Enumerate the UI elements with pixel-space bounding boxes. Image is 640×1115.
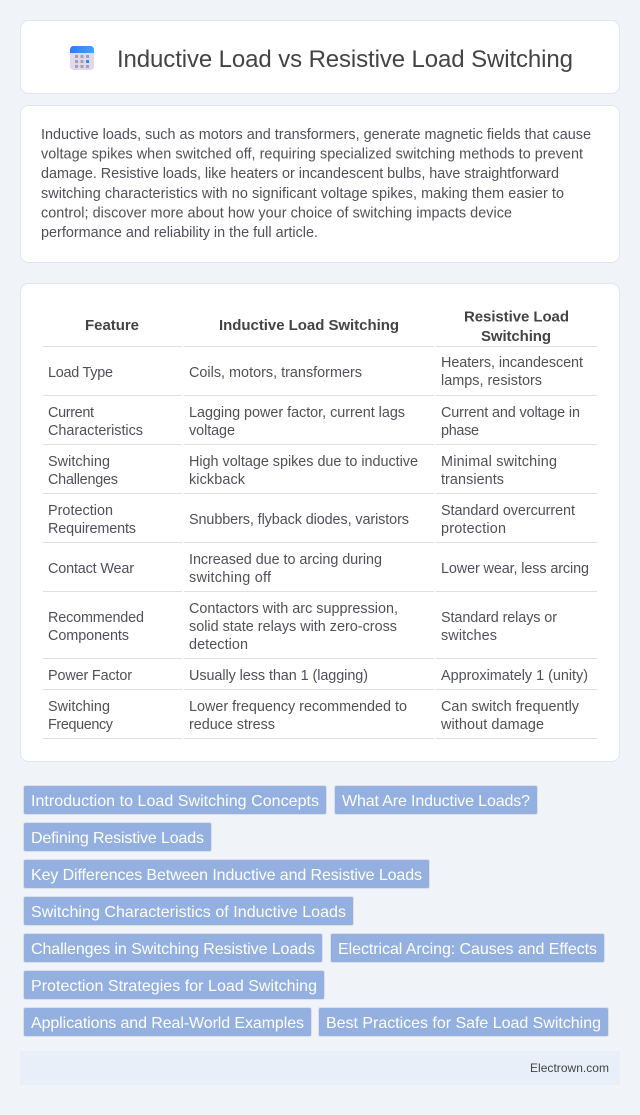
icon: calendar grid bbox=[70, 46, 94, 70]
tag: protection strategies: Protection Strategies for Load Switching bbox=[31, 978, 317, 995]
row: current characteristics: Current bbox=[48, 405, 94, 421]
table header: Switching bbox=[481, 328, 551, 345]
row: recommended components: Standard relays or bbox=[441, 610, 557, 626]
row: current characteristics: voltage bbox=[189, 423, 235, 439]
table header: Resistive Load bbox=[464, 308, 569, 326]
row: load type: Coils, motors, transformers bbox=[189, 365, 362, 381]
row: protection requirements bbox=[43, 503, 597, 543]
row: power factor: Power Factor bbox=[48, 668, 132, 684]
panel: introduction bbox=[20, 106, 620, 262]
tag: challenges bbox=[24, 934, 322, 962]
row: current characteristics: Current and voltage in bbox=[441, 405, 580, 421]
tag: electrical arcing: Electrical Arcing: Causes and Effects bbox=[338, 941, 597, 958]
row: contact wear: Increased due to arcing during bbox=[189, 552, 382, 568]
intro paragraph bbox=[41, 127, 591, 241]
intro paragraph: Inductive loads, such as motors and transformers, generate magnetic fields that cause bbox=[41, 127, 591, 143]
tag: resistive loads bbox=[24, 822, 212, 852]
row: current characteristics: Lagging power factor, current lags bbox=[189, 405, 405, 421]
row: switching challenges: transients bbox=[441, 472, 504, 488]
footer bar bbox=[20, 1051, 620, 1085]
intro paragraph: performance and reliability in the full article. bbox=[41, 225, 318, 241]
intro paragraph: damage. Resistive loads, like heaters or incandescent bulbs, have straightforward bbox=[41, 166, 559, 182]
row: protection requirements: Snubbers, flyback diodes, varistors bbox=[189, 512, 409, 528]
tag: best practices: Best Practices for Safe Load Switching bbox=[326, 1015, 601, 1032]
row: power factor bbox=[43, 668, 597, 690]
tag: inductive loads bbox=[334, 786, 538, 814]
row: protection requirements: Protection bbox=[48, 503, 113, 519]
row: recommended components: Contactors with arc suppression, bbox=[189, 601, 398, 617]
title: Inductive Load vs Resistive Load Switching bbox=[117, 46, 573, 73]
row: power factor: Approximately 1 (unity) bbox=[441, 668, 588, 684]
tag: switching characteristics bbox=[24, 896, 354, 926]
intro paragraph: control; discover more about how your choice of switching impacts device bbox=[41, 205, 512, 221]
row: switching frequency: reduce stress bbox=[189, 717, 275, 733]
row: protection requirements: Standard overcurrent bbox=[441, 503, 575, 519]
row: switching frequency: Can switch frequently bbox=[441, 699, 580, 715]
row: protection requirements: Requirements bbox=[48, 521, 136, 537]
table header: Feature bbox=[85, 317, 139, 334]
row: contact wear: switching off bbox=[189, 570, 272, 586]
tag: resistive loads: Defining Resistive Loads bbox=[31, 830, 204, 847]
row: contact wear bbox=[43, 552, 597, 592]
row: current characteristics bbox=[43, 405, 597, 445]
tag: electrical arcing bbox=[330, 934, 604, 962]
row: switching frequency: Switching bbox=[48, 699, 110, 715]
row: load type: Load Type bbox=[48, 365, 113, 381]
intro paragraph: switching characteristics with no significant voltage spikes, making them easier to bbox=[41, 186, 564, 202]
row: switching challenges: Switching bbox=[48, 454, 110, 470]
row: switching frequency: Frequency bbox=[48, 717, 114, 733]
panel: comparison table bbox=[20, 284, 620, 762]
row: load type: lamps, resistors bbox=[441, 373, 542, 389]
row: switching challenges: kickback bbox=[189, 472, 246, 488]
tag: applications bbox=[24, 1008, 312, 1036]
row: switching challenges: Challenges bbox=[48, 472, 118, 488]
row: recommended components bbox=[43, 601, 597, 659]
row: recommended components: detection bbox=[189, 637, 248, 653]
tag: introduction bbox=[24, 786, 326, 814]
tag: best practices bbox=[318, 1008, 608, 1036]
row: current characteristics: phase bbox=[441, 423, 479, 439]
tag: key differences: Key Differences Between Inductive and Resistive Loads bbox=[31, 867, 422, 884]
row: recommended components: Components bbox=[48, 628, 129, 644]
row: recommended components: solid state relays with zero-cross bbox=[189, 619, 397, 635]
row: switching challenges bbox=[43, 454, 597, 494]
topic tags bbox=[24, 786, 608, 1036]
row: power factor: Usually less than 1 (lagging) bbox=[189, 668, 368, 684]
row: switching challenges: High voltage spikes due to inductive bbox=[189, 454, 418, 470]
row: load type bbox=[43, 355, 597, 396]
row: load type: Heaters, incandescent bbox=[441, 355, 583, 371]
row: recommended components: Recommended bbox=[48, 610, 144, 626]
row: switching challenges: Minimal switching bbox=[441, 454, 557, 470]
row: contact wear: Lower wear, less arcing bbox=[441, 561, 589, 577]
tag: key differences bbox=[24, 860, 430, 888]
tag: protection strategies bbox=[24, 970, 324, 1000]
tag: applications: Applications and Real-World Examples bbox=[31, 1015, 304, 1032]
tag: introduction: Introduction to Load Switching Concepts bbox=[31, 793, 319, 810]
footer credit: Electrown.com bbox=[530, 1061, 609, 1075]
table header: Inductive Load Switching bbox=[219, 317, 399, 334]
tag: switching characteristics: Switching Characteristics of Inductive Loads bbox=[31, 904, 346, 921]
tag: challenges: Challenges in Switching Resistive Loads bbox=[31, 941, 315, 958]
row: switching frequency: Lower frequency recommended to bbox=[189, 699, 407, 715]
header panel bbox=[20, 20, 620, 94]
row: recommended components: switches bbox=[441, 628, 497, 644]
row: switching frequency: without damage bbox=[440, 717, 544, 733]
row: contact wear: Contact Wear bbox=[48, 561, 134, 577]
row: protection requirements: protection bbox=[441, 521, 506, 537]
row: switching frequency bbox=[43, 699, 597, 739]
tag: inductive loads: What Are Inductive Loads? bbox=[342, 793, 530, 810]
table header bbox=[43, 308, 597, 347]
row: current characteristics: Characteristics bbox=[48, 423, 143, 439]
intro paragraph: voltage spikes when switched off, requiring specialized switching methods to prevent bbox=[41, 147, 583, 163]
